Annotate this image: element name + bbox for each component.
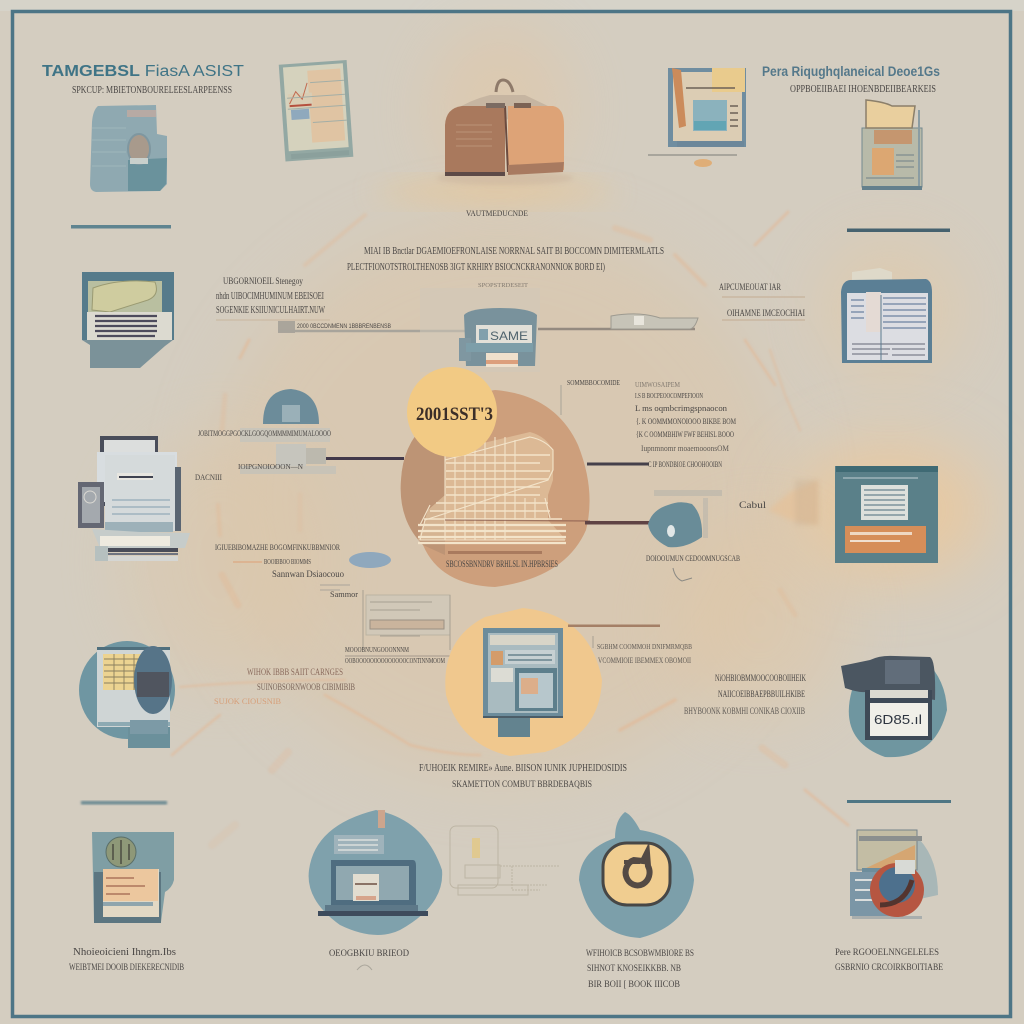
icon: chart document: [279, 60, 353, 162]
divider top left: [71, 225, 171, 228]
text block: right row 2: AIPCUMEOUAT IAR: [719, 283, 781, 293]
title: top left: TAMGEBSL FiasA ASIST: [42, 63, 245, 80]
icon: book frame: [648, 68, 746, 167]
text block: left of bottom circle: [345, 646, 450, 665]
center heading text: MIAI IB Bnctlar DGAEMIOEFRONLAISE NORRNAL SAIT BI BOCCOMN DIMITERMLATLS: [364, 246, 664, 257]
icon: briefcase: [437, 80, 573, 185]
connector: scanner left bar: [278, 321, 465, 333]
connector: hub right top: [587, 462, 649, 466]
icon: left row 4 monitor: [79, 641, 175, 748]
icon: top right document: [862, 100, 922, 190]
text block: dome labels: IOIPGNOIOOON—N: [238, 462, 304, 471]
bottom circle caption: OEOGBKIU BRIEOD: [329, 948, 409, 958]
icon: folder top left: [90, 105, 167, 192]
orange connector streaks: [172, 212, 848, 845]
text block: left row 2: SOGENKIE KSIIUNICULHAIRT.NUW: [216, 305, 325, 316]
label above scanner: SPOPSTRDESEIT: [478, 283, 528, 289]
connector: hub right bottom: [585, 521, 649, 524]
text block: left row 3 lower: BOOIBBOO BIOMMS: [264, 558, 311, 566]
text block: hub right: I.S B BOCPEOOCOMPEFIOON: [635, 391, 703, 400]
text block: hub right: L ms oqmbcrimgspnaocon: [635, 404, 727, 413]
text block: bottom right center: SIHNOT KNOSEIKKBB. NB: [587, 964, 681, 974]
icon: yellow squircle on blue circle: [579, 812, 694, 938]
center heading text: PLECTFIONOTSTROLTHENOSB 3IGT KRHIRY BSIOCNCKRANONNIOK BORD EI): [347, 262, 605, 273]
divider bottom right: [847, 800, 951, 803]
badge: hub number: [407, 367, 497, 457]
text block: right row 4: NiOHBIOBMMOOCOOBOIIHEIK: [715, 674, 806, 684]
text block: bottom right center: BIR BOII [ BOOK IIICOB: [588, 980, 680, 990]
text block: left row 3 lower: Sannwan Dsiaocouo: [272, 569, 344, 579]
text block: right of bottom circle: VCOMMIOIE IBEMMEX OBOMOII: [598, 656, 691, 665]
icon: camera on blue circle: [841, 656, 947, 757]
icon: blue blob: [648, 490, 722, 547]
text block: bottom left: [69, 947, 184, 973]
text block: left row 2: [216, 277, 330, 320]
text block: bottom center: F/UHOEIK REMIRE» Aune. BIISON IUNIK JUPHEIDOSIDIS: [419, 762, 627, 774]
text block: dome labels: [195, 429, 331, 482]
icon: scanner: [420, 288, 540, 372]
connector: bottom circle right: [568, 624, 660, 627]
connector: hub left: [318, 457, 404, 460]
blue blob caption: DOIOOUMUN CEDOOMNUGSCAB: [646, 554, 740, 563]
divider top right: [847, 228, 950, 232]
text block: left row 3 lower: Sammor: [330, 590, 358, 599]
subtitle: top left: SPKCUP: MBIETONBOURELEESLARPEENSS: [72, 85, 232, 96]
text block: dome labels: DACNIII: [195, 473, 222, 482]
text block: hub right: Iupnmnomr moaemooonsOM: [641, 444, 729, 453]
text block: bottom left: Nhoieoicieni Ihngm.Ibs: [73, 947, 176, 958]
icon: right row 2 document: [841, 268, 932, 363]
text block: right row 2: OIHAMNE IMCEOCHIAI: [727, 308, 805, 318]
text block: hub right: SOMMBBOCOMIDE: [567, 378, 620, 387]
text block: right row 4: BHYBOONK KOBMHI CONIKAB CIOXIIB: [684, 706, 805, 716]
heading: top right: Pera Riqughqlaneical Deoe1Gs: [762, 64, 940, 79]
text block: hub right: {. K OOMMMONOIOOO BIKBE BOM: [636, 417, 736, 426]
text block: bottom center: [419, 762, 627, 790]
center circle: main hub: [401, 390, 590, 587]
text block: left row 4: SUINOBSORNWOOB CIBIMIBIB: [257, 682, 355, 692]
text block: bottom right: [835, 948, 943, 973]
text block: right row 4: [684, 674, 806, 716]
building sketch: [418, 432, 566, 543]
text block: hub right: {K C OOMMBHIW FWF BEHISL BOOO: [636, 430, 734, 439]
icon: faint sketch: [450, 826, 560, 895]
badge: hub number: 2001SST'3: [416, 404, 493, 425]
divider bottom left: [81, 801, 167, 804]
text block: left of bottom circle: OOBOOOOOOOOOOOOOOCONTINNMOOM: [345, 657, 446, 665]
background glow: [120, 25, 990, 780]
icon: stacked disk and files: [850, 830, 938, 919]
connector: scanner left bar: 2000 0BCCDNMENN 1BBBRENBENSB: [297, 324, 391, 330]
icon: camera on blue circle: 6D85.ıl: [874, 712, 922, 727]
text block: bottom right: Pere RGOOELNNGELELES: [835, 948, 939, 958]
text block: right row 4: NAIICOEIBBAEPBBUILHKIBE: [718, 690, 805, 700]
bottom circle caption: [329, 948, 409, 970]
text block: right row 2: [719, 283, 805, 320]
small label: right: Cabul: [739, 501, 766, 511]
icon: wallet left: [82, 272, 174, 368]
text block: bottom left: WEIBTMEI DOOIB DIEKERECNIDIB: [69, 963, 184, 973]
text block: left row 3 lower: IGIUEBIBOMAZHE BOGOMFINKUBBMNIOR: [215, 542, 340, 552]
text block: bottom right center: WFIHOICB BCSOBWMBIORE BS: [586, 949, 694, 959]
text block: right of bottom circle: SGBHM COOMMOH DNIFMRMQBB: [597, 642, 692, 651]
text block: bottom right: GSBRNIO CRCOIRKBOITIABE: [835, 963, 943, 973]
briefcase caption: VAUTMEDUCNDE: [466, 208, 528, 218]
text block: left of bottom circle: MOOOBNUNGOOONNNM: [345, 646, 410, 654]
blue blob caption: [646, 554, 740, 581]
icon: faint small chart: [363, 590, 450, 650]
text block: left row 2: nhdn UIBOCIMHUMINUM EBEISOEI: [216, 291, 324, 302]
text block: right of bottom circle: [593, 636, 692, 665]
text block: left row 4: [214, 667, 355, 706]
text block: bottom center: SKAMETTON COMBUT BBRDEBAQBIS: [452, 780, 592, 790]
center heading text: [347, 246, 664, 273]
text block: bottom right center: [586, 949, 694, 990]
text block: left row 3 lower: [215, 542, 391, 599]
text block: hub right: [561, 378, 736, 469]
connector: scanner right with device: [538, 314, 698, 329]
text block: dome labels: JOBITMOGGPGOCKLGOGQOMMMMIMUMALOOOO: [198, 429, 331, 438]
icon: right monitor: [768, 466, 938, 563]
icon: bottom left document: [91, 832, 174, 923]
text block: left row 4: WIHOK IBBB SAIIT CARNGES: [247, 667, 343, 677]
text block: hub right: UIMWOSAIPEM: [635, 380, 680, 389]
icon: left printer: [78, 436, 190, 561]
text block: hub right: C IP BONDBIOE CHOOHOOIBN: [648, 460, 722, 469]
icon: dome device: [240, 389, 336, 474]
hub caption: SBCOSSBNNDRV BRHLSL IN.HPBRSIES: [446, 560, 558, 570]
icon: scanner: SAME: [490, 329, 528, 343]
subheading: top right: OPPBOEIIBAEI IHOENBDEIIBEARKEIS: [790, 84, 936, 95]
bottom center circle: monitor: [445, 608, 602, 756]
icon: bottom circle laptop: [309, 810, 442, 935]
text block: left row 2: UBGORNIOEIL Stenegoy: [223, 277, 303, 287]
text block: left row 4: SUJOK CIOUSNIB: [214, 696, 281, 706]
